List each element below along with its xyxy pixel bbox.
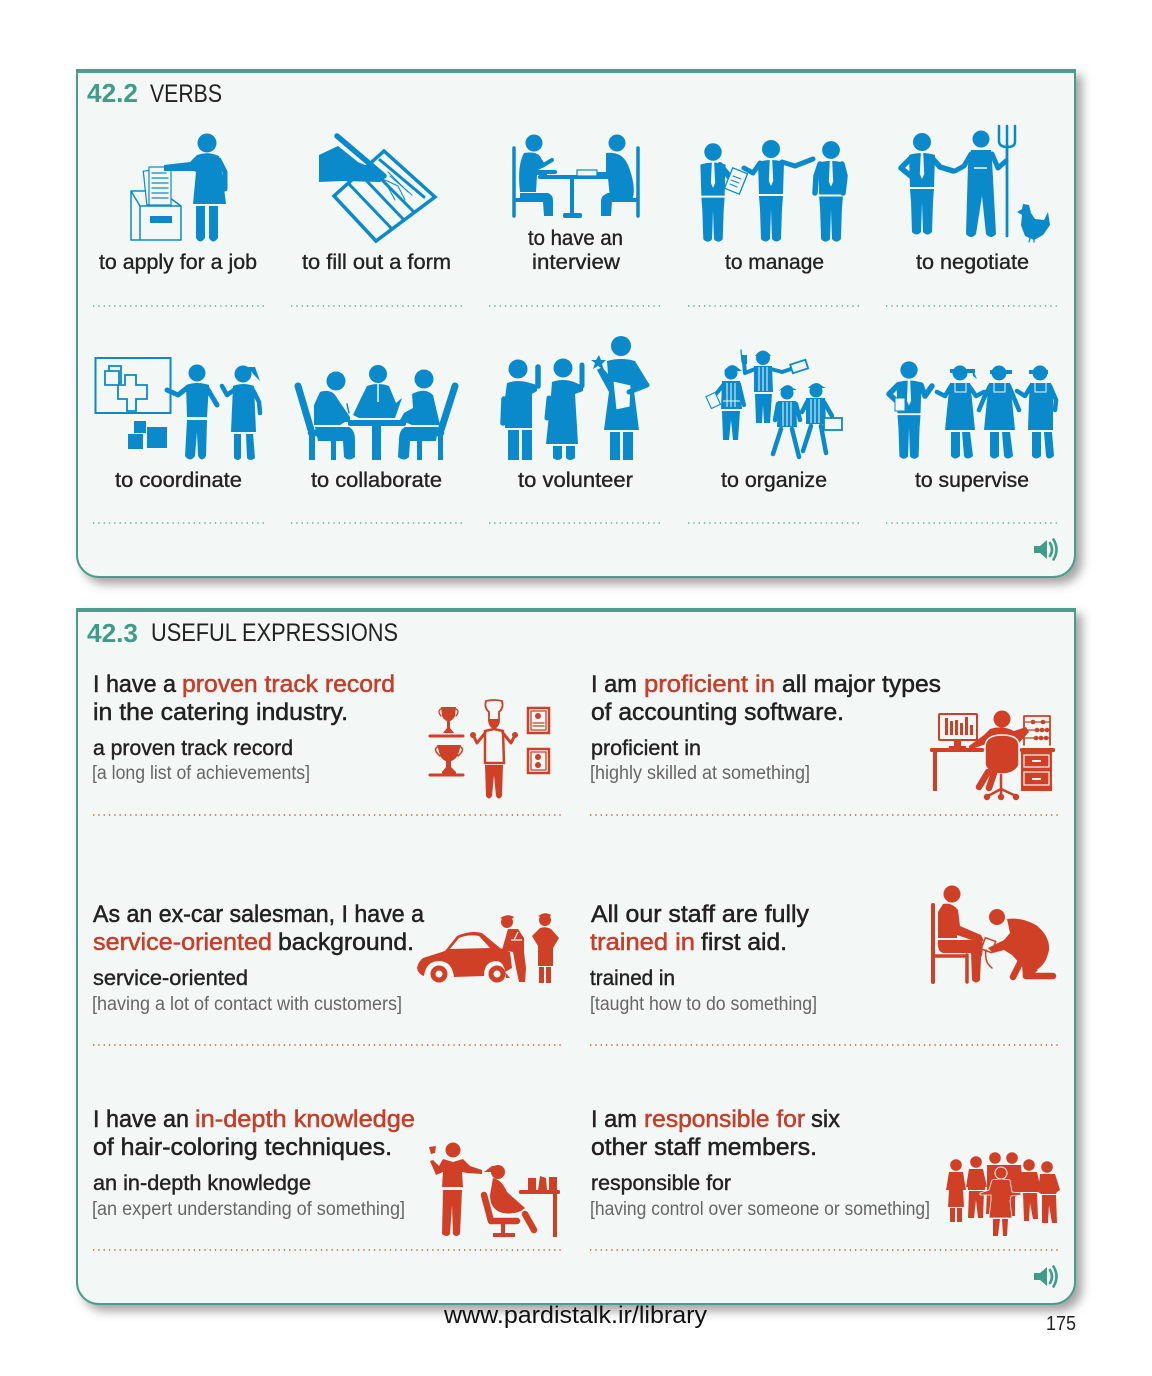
- text block: trained in: [590, 901, 817, 1015]
- icon: chef with trophies and certificates: [430, 700, 549, 798]
- icon: salesman with car and customer: [417, 913, 559, 983]
- text block: proven track record: [92, 671, 395, 784]
- text block: proficient in: proficient in: [644, 671, 775, 698]
- text block: proven track record: [a long list of achievements]: [92, 763, 310, 784]
- text block: responsible for: I am: [591, 1106, 637, 1133]
- label: to fill out a form: to fill out a form: [302, 251, 451, 274]
- text block: responsible for: six: [811, 1106, 840, 1133]
- text block: service-oriented: service-oriented: [93, 929, 272, 956]
- icon: to apply for a job: [131, 134, 226, 242]
- text block: service-oriented: service-oriented: [93, 967, 248, 990]
- text block: proficient in: of accounting software.: [591, 699, 844, 726]
- text block: service-oriented: background.: [278, 929, 414, 956]
- text block: responsible for: other staff members.: [591, 1134, 817, 1161]
- label: to supervise: to supervise: [915, 469, 1029, 492]
- text block: service-oriented: [having a lot of contact with customers]: [92, 994, 402, 1015]
- text block: proficient in: I am: [591, 671, 637, 698]
- label: to manage: to manage: [725, 251, 824, 274]
- icon: to fill out a form: [319, 136, 435, 241]
- text block: proven track record: proven track record: [182, 671, 395, 698]
- label: to negotiate: to negotiate: [916, 251, 1029, 274]
- text block: responsible for: [having control over someone or something]: [590, 1199, 930, 1220]
- label: to organize: to organize: [721, 469, 827, 492]
- icon: to have an interview: [514, 134, 638, 218]
- label: to have an interview: interview: [532, 251, 621, 274]
- footer: website link: www.pardistalk.ir/library: [443, 1302, 707, 1329]
- icon: to negotiate: [901, 126, 1050, 242]
- label: to apply for a job: to apply for a job: [99, 251, 257, 274]
- text block: trained in: first aid.: [701, 929, 787, 956]
- text block: service-oriented: [92, 901, 425, 1015]
- icon: audio speaker: [1034, 540, 1056, 560]
- text block: service-oriented: As an ex-car salesman, I have a: [93, 901, 425, 928]
- text block: trained in: [taught how to do something]: [590, 994, 817, 1015]
- icon: hair colorist with client: [429, 1142, 560, 1237]
- text block: proficient in: [highly skilled at something]: [590, 763, 810, 784]
- icon: accountant at desk with abacus: [930, 710, 1055, 800]
- icon: to supervise: [889, 361, 1056, 459]
- text block: in-depth knowledge: [an expert understanding of something]: [92, 1199, 405, 1220]
- text block: in-depth knowledge: I have an: [93, 1106, 189, 1133]
- label: to coordinate: to coordinate: [115, 469, 242, 492]
- heading: 42.3 useful expressions: [87, 618, 398, 648]
- label: to have an interview: [528, 227, 623, 274]
- label: to have an interview: to have an: [528, 227, 623, 250]
- heading: 42.3 useful expressions: USEFUL EXPRESSIONS: [151, 619, 398, 647]
- icon: to manage: [700, 140, 845, 242]
- label: to volunteer: to volunteer: [518, 469, 633, 492]
- text block: proficient in: proficient in: [591, 737, 701, 760]
- icon: group of staff with manager: [946, 1152, 1060, 1236]
- panel: 42.3 useful expressions: [76, 608, 1076, 1304]
- heading: 42.3 useful expressions: 42.3: [87, 618, 138, 648]
- text block: responsible for: [590, 1106, 930, 1220]
- text block: proficient in: all major types: [782, 671, 941, 698]
- label: to collaborate: to collaborate: [311, 469, 442, 492]
- page number: 175: [1046, 1313, 1076, 1335]
- heading: 42.2 verbs: 42.2: [87, 78, 138, 108]
- icon: to coordinate: [96, 358, 260, 460]
- text block: trained in: trained in: [590, 929, 695, 956]
- text block: responsible for: responsible for: [644, 1106, 805, 1133]
- panel: 42.2 verbs: [76, 69, 1076, 577]
- icon: to collaborate: [298, 365, 455, 460]
- heading: 42.2 verbs: VERBS: [150, 80, 222, 108]
- text block: proven track record: a proven track record: [93, 737, 293, 760]
- text block: trained in: trained in: [590, 967, 675, 990]
- icon: audio speaker: [1034, 1266, 1056, 1286]
- icon: first aid bandaging leg: [933, 886, 1053, 982]
- text block: in-depth knowledge: an in-depth knowledge: [93, 1172, 311, 1195]
- heading: 42.2 verbs: [87, 78, 222, 108]
- text block: in-depth knowledge: [92, 1106, 415, 1220]
- text block: proficient in: [590, 671, 941, 784]
- text block: proven track record: in the catering industry.: [93, 699, 348, 726]
- text block: in-depth knowledge: of hair-coloring techniques.: [93, 1134, 392, 1161]
- text block: responsible for: responsible for: [591, 1172, 731, 1195]
- icon: to volunteer: [503, 336, 649, 460]
- text block: proven track record: I have a: [93, 671, 177, 698]
- icon: to organize: [706, 350, 842, 457]
- text block: trained in: All our staff are fully: [591, 901, 809, 928]
- text block: in-depth knowledge: in-depth knowledge: [195, 1106, 415, 1133]
